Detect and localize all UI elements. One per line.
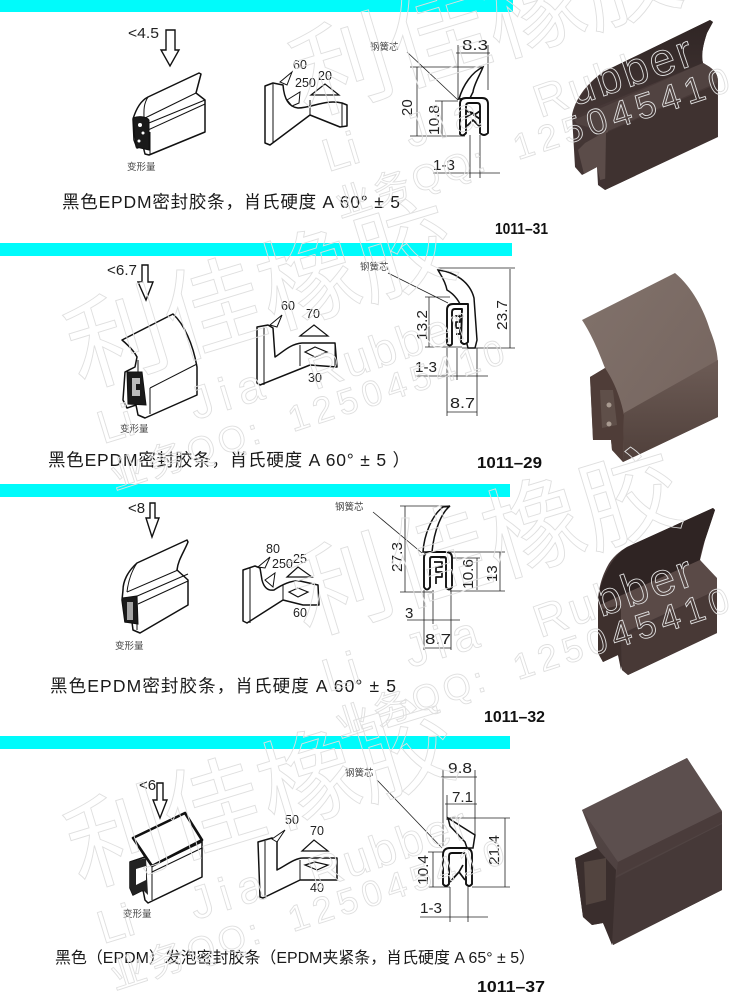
arrow: compression: [161, 30, 179, 66]
watermark: seller marks: Jia: [183, 856, 277, 930]
deformation caption: 变形量: [127, 161, 156, 173]
section drawing with dimensions: 8.7: [425, 631, 451, 648]
watermark: seller marks: Li: [316, 121, 365, 182]
heading bar: [0, 484, 510, 497]
load profile icon: 60: [293, 58, 307, 72]
arrow: compression: [146, 503, 159, 537]
part number: 1011–31: [495, 221, 548, 238]
watermark: seller marks: 125045410: [283, 331, 509, 440]
section drawing with dimensions: 7.1: [452, 789, 473, 806]
watermark: seller marks: Li: [316, 641, 365, 702]
section drawing with dimensions: 10.4: [415, 855, 432, 885]
panel: strip 1011-31: [0, 0, 718, 238]
watermark: seller marks: 业务QQ:: [330, 139, 490, 226]
product photo: [582, 273, 718, 462]
section drawing with dimensions: 21.4: [486, 835, 503, 865]
load profile icon: 20: [318, 69, 332, 83]
watermark: seller marks: 125045410: [508, 59, 734, 168]
watermark: seller marks: 利佳橡胶: [279, 432, 694, 656]
load profile icon: [258, 813, 337, 898]
watermark: seller marks: Jia: [398, 604, 492, 678]
watermark: seller marks: Rubber: [526, 25, 699, 127]
section drawing with dimensions: 8.3: [462, 37, 488, 54]
deformation label <8: <8: [128, 500, 145, 517]
section drawing with dimensions: 8.7: [450, 395, 475, 412]
load profile icon: 60: [293, 606, 307, 620]
section drawing with dimensions: 1-3: [433, 157, 455, 174]
watermark: seller marks: Li: [91, 893, 140, 954]
load profile icon: 70: [306, 307, 320, 321]
product photo: [572, 20, 718, 190]
section drawing with dimensions: 13.2: [414, 310, 431, 340]
section drawing with dimensions: 23.7: [494, 300, 511, 330]
watermark: seller marks: Rubber: [526, 545, 699, 647]
strip isometric drawing: [130, 813, 202, 903]
panel: strip 1011-29: [0, 243, 718, 472]
deformation label <4.5: <4.5: [128, 25, 159, 42]
section drawing with dimensions: 钢簧芯: [360, 261, 389, 273]
section drawing with dimensions: [345, 760, 510, 922]
strip isometric drawing: [133, 73, 205, 155]
section drawing with dimensions: 3: [405, 605, 413, 622]
material caption: 黑色EPDM密封胶条，肖氏硬度 A 60° ± 5: [62, 192, 400, 212]
watermark: seller marks: 业务QQ:: [330, 659, 490, 746]
deformation caption: 变形量: [123, 908, 152, 920]
arrow: compression: [153, 783, 167, 818]
load profile icon: 70: [310, 824, 324, 838]
section drawing with dimensions: 20: [399, 99, 416, 116]
load profile icon: 50: [285, 813, 299, 827]
load profile icon: 25: [293, 552, 307, 566]
deformation caption: 变形量: [120, 423, 149, 435]
material caption: 黑色（EPDM）发泡密封胶条（EPDM夹紧条，肖氏硬度 A 65° ± 5）: [55, 949, 535, 967]
watermark: seller marks: 125045410: [283, 831, 509, 940]
product photo: [598, 508, 717, 675]
watermark: seller marks: 利佳橡胶: [54, 184, 469, 408]
watermark: seller marks: Rubber: [301, 297, 474, 399]
section drawing with dimensions: 10.8: [426, 105, 443, 135]
watermark: seller marks: 业务QQ:: [105, 911, 265, 998]
strip isometric drawing: [122, 314, 197, 418]
load profile icon: 60: [281, 299, 295, 313]
section drawing with dimensions: 27.3: [389, 542, 406, 572]
watermark: seller marks: Rubber: [301, 797, 474, 899]
load profile icon: [243, 542, 319, 623]
product photo: [575, 758, 722, 945]
arrow: compression: [138, 265, 153, 300]
section drawing with dimensions: [360, 261, 515, 416]
deformation label <6: <6: [139, 777, 156, 794]
section drawing with dimensions: [370, 37, 500, 178]
section drawing with dimensions: 钢簧芯: [370, 41, 399, 53]
watermark: seller marks: 业务QQ:: [105, 411, 265, 498]
section drawing with dimensions: 钢簧芯: [335, 501, 364, 513]
section drawing with dimensions: 13: [484, 565, 501, 582]
panel: strip 1011-37: [0, 736, 722, 996]
watermark: seller marks: 125045410: [508, 579, 734, 688]
section drawing with dimensions: 10.6: [460, 559, 477, 589]
load profile icon: 250: [295, 76, 316, 90]
watermark: seller marks: 利佳橡胶: [54, 684, 469, 908]
load profile icon: [265, 58, 347, 145]
deformation caption: 变形量: [115, 640, 144, 652]
part number: 1011–29: [477, 455, 542, 472]
section drawing with dimensions: 钢簧芯: [345, 767, 374, 779]
load profile icon: [257, 299, 337, 385]
load profile icon: 80: [266, 542, 280, 556]
load profile icon: 40: [310, 881, 324, 895]
strip isometric drawing: [122, 540, 188, 633]
part number: 1011–32: [484, 709, 545, 726]
load profile icon: 250: [272, 557, 293, 571]
material caption: 黑色EPDM密封胶条，肖氏硬度 A 60° ± 5: [50, 676, 396, 696]
section drawing with dimensions: 1-3: [415, 359, 437, 376]
part number: 1011–37: [477, 979, 545, 996]
panel: strip 1011-32: [0, 484, 717, 726]
deformation label <6.7: <6.7: [107, 262, 137, 279]
section drawing with dimensions: 1-3: [420, 900, 442, 917]
heading bar: [0, 736, 510, 749]
watermark: seller marks: Jia: [398, 84, 492, 158]
material caption: 黑色EPDM密封胶条，肖氏硬度 A 60° ± 5 ）: [48, 450, 410, 470]
section drawing with dimensions: [335, 501, 505, 650]
load profile icon: 30: [308, 371, 322, 385]
heading bar: [0, 0, 513, 12]
heading bar: [0, 243, 512, 256]
watermark: seller marks: Jia: [183, 356, 277, 430]
section drawing with dimensions: 9.8: [448, 760, 472, 777]
watermark: seller marks: Li: [91, 393, 140, 454]
